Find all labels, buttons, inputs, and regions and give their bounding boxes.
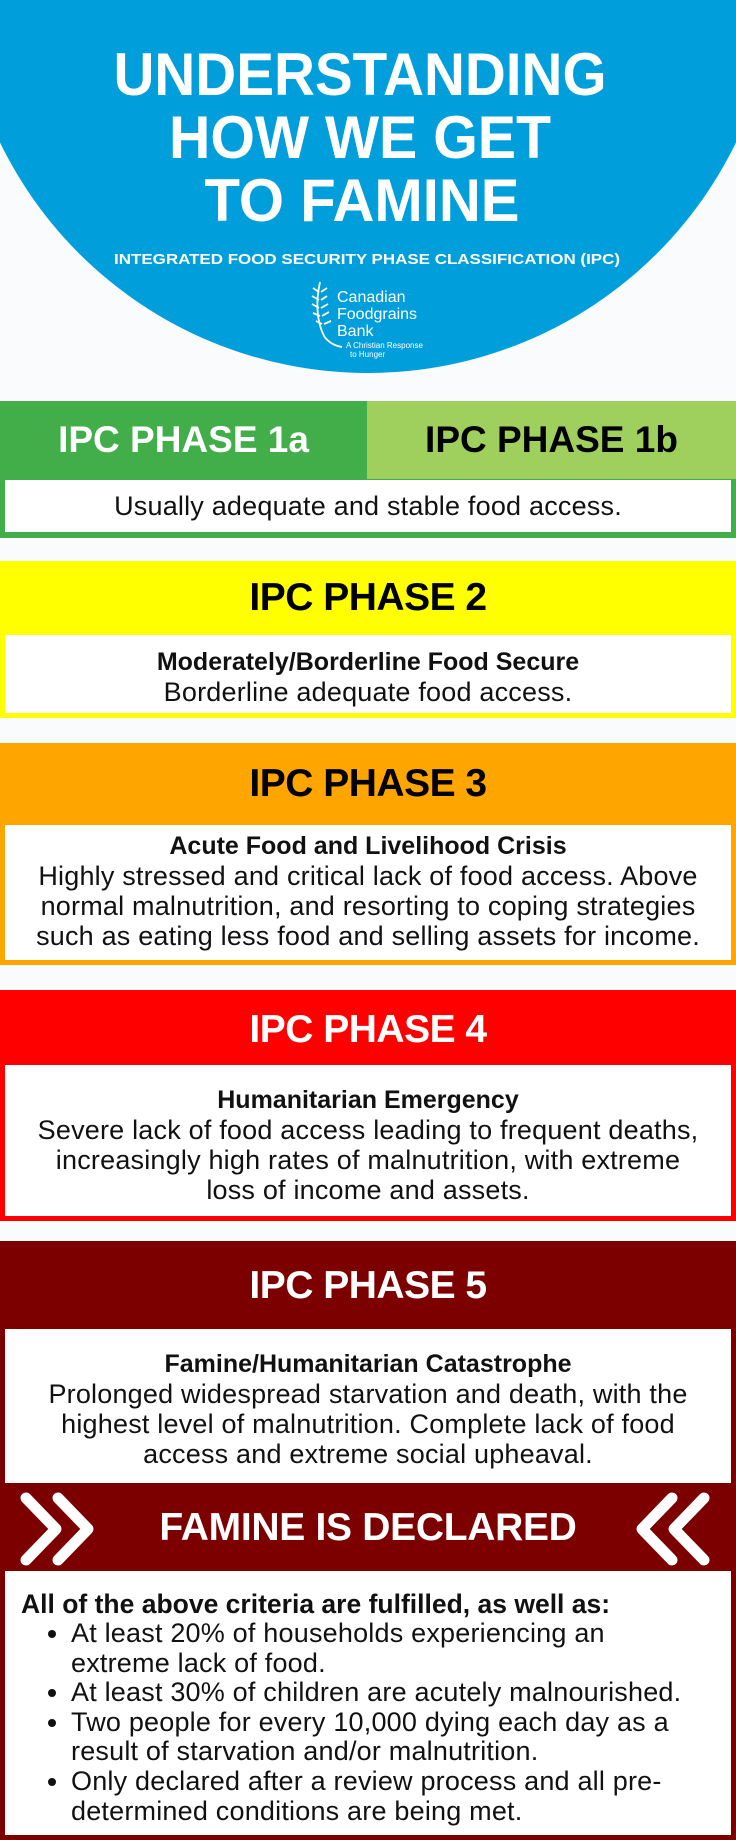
subtitle: INTEGRATED FOOD SECURITY PHASE CLASSIFICATION (IPC)	[114, 251, 620, 268]
phase 1b header: IPC PHASE 1b	[425, 419, 678, 460]
phase 3 text: Highly stressed and critical lack of food access. Above	[38, 861, 698, 891]
phase 3 text: normal malnutrition, and resorting to coping strategies	[41, 891, 695, 921]
title	[114, 41, 606, 234]
title: TO FAMINE	[204, 167, 520, 234]
famine criteria text	[5, 1571, 731, 1835]
phase 5 text: highest level of malnutrition. Complete lack of food	[61, 1409, 675, 1439]
phase 4 text: loss of income and assets.	[206, 1175, 530, 1205]
phase 2 text: Moderately/Borderline Food Secure	[157, 648, 579, 676]
title: HOW WE GET	[169, 104, 551, 171]
phase 3 text: Acute Food and Livelihood Crisis	[169, 832, 567, 860]
phase 2 header: IPC PHASE 2	[249, 576, 487, 619]
criteria list: At least 20% of households experiencing an	[71, 1618, 605, 1648]
famine declared heading: FAMINE IS DECLARED	[159, 1506, 577, 1549]
title: UNDERSTANDING	[114, 41, 606, 108]
header circle with title: Canadian	[337, 289, 406, 306]
phase 5 text: Famine/Humanitarian Catastrophe	[164, 1350, 572, 1378]
criteria list: extreme lack of food.	[71, 1648, 326, 1678]
phase 4 text: increasingly high rates of malnutrition, with extreme	[56, 1145, 680, 1175]
panel: phase 1	[0, 401, 736, 538]
phase 3 text: such as eating less food and selling assets for income.	[36, 921, 700, 951]
criteria list: determined conditions are being met.	[71, 1796, 522, 1826]
panel: phase 3	[0, 743, 736, 965]
criteria intro: All of the above criteria are fulfilled, as well as:	[21, 1589, 610, 1619]
criteria list: result of starvation and/or malnutrition.	[71, 1736, 538, 1766]
header circle with title: A Christian Response	[346, 341, 423, 350]
phase 2 text: Borderline adequate food access.	[164, 677, 572, 707]
phase 3 text	[5, 825, 731, 960]
phase 2 text	[5, 635, 731, 713]
phase 5 text: Prolonged widespread starvation and death, with the	[48, 1379, 688, 1409]
header circle with title: Foodgrains	[337, 306, 417, 323]
panel: phase 5 and famine	[0, 1241, 736, 1840]
criteria list: Only declared after a review process and all pre-	[71, 1766, 662, 1796]
criteria list: At least 30% of children are acutely malnourished.	[71, 1677, 681, 1707]
header circle with title: to Hunger	[350, 350, 385, 359]
header circle with title: Bank	[337, 323, 374, 340]
phase 5 header: IPC PHASE 5	[249, 1264, 487, 1307]
header circle with title	[0, 0, 736, 373]
phase 5 text	[5, 1329, 731, 1483]
panel: phase 4	[0, 990, 736, 1221]
panel: phase 2	[0, 561, 736, 718]
phase 3 header: IPC PHASE 3	[249, 762, 487, 805]
phase 4 text: Humanitarian Emergency	[217, 1086, 519, 1114]
phase 5 text: access and extreme social upheaval.	[143, 1439, 593, 1469]
phase 1b header	[367, 401, 736, 479]
criteria list	[48, 1618, 681, 1826]
phase 4 header: IPC PHASE 4	[249, 1008, 487, 1051]
icon: left double chevron	[20, 1492, 94, 1566]
famine declared banner	[20, 1492, 710, 1566]
phase 1a header	[0, 401, 367, 479]
criteria list: Two people for every 10,000 dying each day as a	[71, 1707, 669, 1737]
phase 4 text: Severe lack of food access leading to frequent deaths,	[38, 1115, 698, 1145]
phase 1a header: IPC PHASE 1a	[58, 419, 309, 460]
logo	[312, 282, 342, 347]
icon: right double chevron	[636, 1492, 710, 1566]
phase 4 text	[5, 1065, 731, 1216]
phase 1 text	[5, 480, 731, 532]
phase 1 text: Usually adequate and stable food access.	[114, 491, 622, 521]
